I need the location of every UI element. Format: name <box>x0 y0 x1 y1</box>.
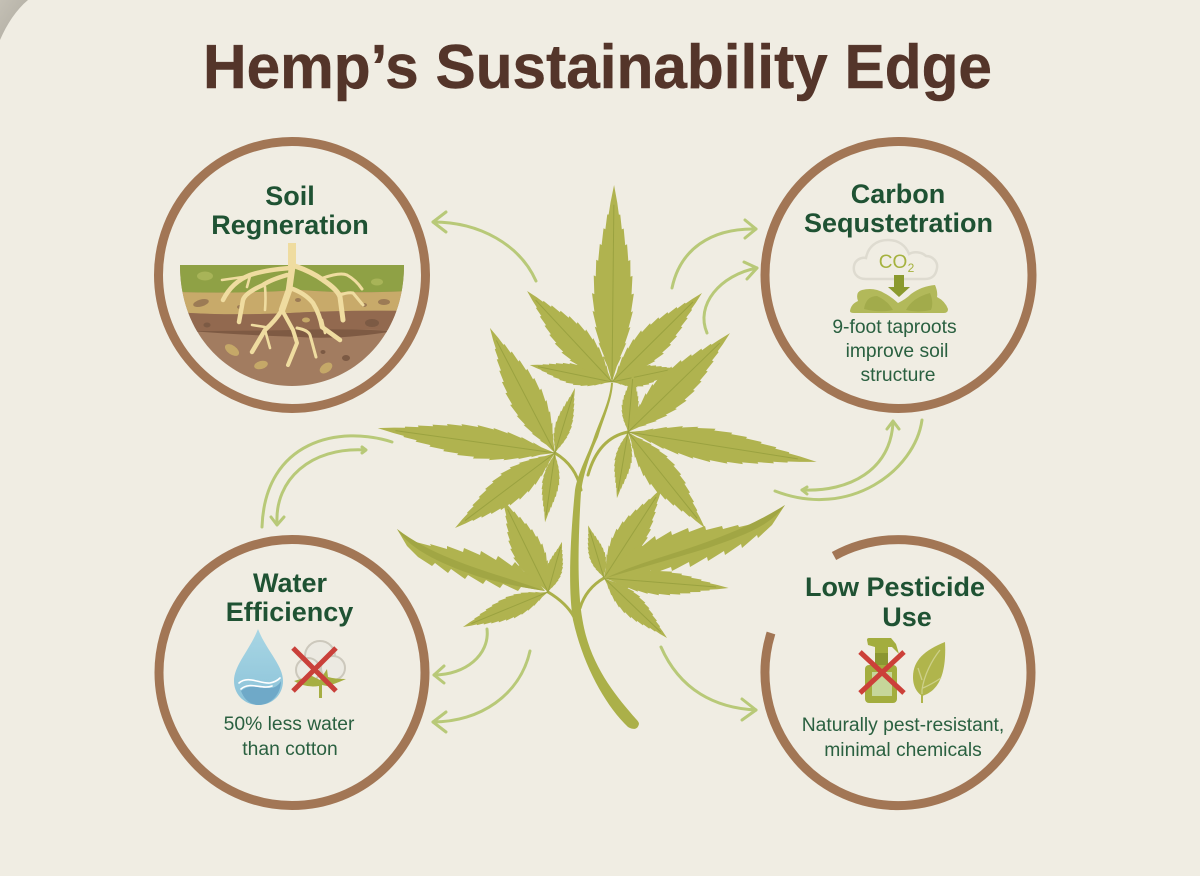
arrow: carbon to plant outer <box>775 420 922 500</box>
body text: 9-foot taproots <box>832 317 957 338</box>
title: Hemp’s Sustainability Edge <box>203 33 992 102</box>
panel: low pesticide use <box>765 540 1031 806</box>
heading: Water <box>253 568 327 598</box>
icon: CO2 cloud <box>854 240 937 279</box>
heading: Low Pesticide <box>805 572 985 602</box>
ring <box>765 142 1032 408</box>
icon: leaf <box>913 642 945 703</box>
body text: 50% less water <box>224 714 355 735</box>
body text line 3: structure <box>860 365 936 386</box>
left leaf <box>375 320 583 541</box>
arrow: plant to water upper <box>434 629 487 683</box>
panel: carbon sequestration <box>765 142 1032 408</box>
stem <box>570 383 639 729</box>
arrow: plant to soil <box>433 212 536 281</box>
arrow: plant to water lower <box>433 651 530 732</box>
soil cross-section <box>180 265 404 386</box>
arrow: water and plant inner <box>271 447 366 525</box>
corner shadow <box>0 0 28 40</box>
body text line 2: improve soil <box>846 341 948 362</box>
roots <box>222 243 363 365</box>
heading line 2: Regneration <box>211 210 369 240</box>
heading line 2: Sequstetration <box>804 208 993 238</box>
body text line 2: than cotton <box>242 739 338 760</box>
branches <box>548 432 628 617</box>
icon: CO2 cloud: CO <box>879 252 907 273</box>
arrow: carbon and plant inner <box>802 421 899 494</box>
heading line 2: Use <box>882 602 932 632</box>
heading: Carbon <box>851 179 945 209</box>
panel: water efficiency <box>159 540 425 806</box>
broken ring <box>765 540 1031 806</box>
top leaf <box>515 185 713 394</box>
icon: water drop <box>234 629 283 705</box>
icon: plants absorbing <box>850 275 948 313</box>
central hemp plant <box>375 185 819 729</box>
lower left leaf <box>397 493 570 638</box>
arrow: plant to carbon upper <box>672 220 756 288</box>
arrow: plant to pesticide <box>661 647 756 720</box>
ring <box>158 142 426 408</box>
icon: crossed cotton <box>293 641 346 698</box>
icon: crossed spray bottle <box>860 638 904 703</box>
heading line 2: Efficiency <box>226 597 353 627</box>
body text line 2: minimal chemicals <box>824 740 982 761</box>
icon: CO2 cloud: 2 <box>908 261 915 275</box>
ring <box>159 540 425 806</box>
panel: soil regeneration <box>158 142 426 408</box>
arrow: water to plant outer <box>262 436 392 527</box>
heading: Soil <box>265 181 315 211</box>
arrow: plant to carbon lower <box>704 262 757 333</box>
right leaf <box>608 320 819 538</box>
body text: Naturally pest-resistant, <box>802 715 1004 736</box>
lower right leaf <box>580 479 785 646</box>
